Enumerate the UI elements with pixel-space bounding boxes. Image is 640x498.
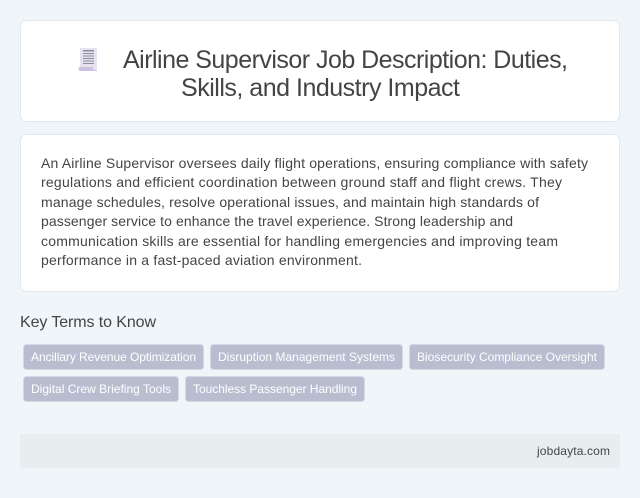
tag: Touchless Passenger Handling: Touchless Passenger Handling [193, 382, 357, 396]
text block: description: passenger service to enhance the travel experience. Strong leadership and [41, 213, 513, 229]
text block: description: An Airline Supervisor oversees daily flight operations, ensuring compliance with safety [41, 155, 588, 171]
text block: description [41, 155, 588, 268]
tag: Disruption Management Systems [210, 344, 402, 370]
text block: description: regulations and efficient coordination between ground staff and flight crews. They [41, 174, 562, 190]
tag: Digital Crew Briefing Tools: Digital Crew Briefing Tools [31, 382, 171, 396]
tag: Ancillary Revenue Optimization [24, 344, 204, 370]
tag: Digital Crew Briefing Tools [24, 376, 178, 402]
tag: Ancillary Revenue Optimization: Ancillary Revenue Optimization [31, 350, 196, 364]
text block: description: manage schedules, resolve operational issues, and maintain high standards of [41, 194, 539, 210]
footer [20, 434, 620, 468]
tag: Biosecurity Compliance Oversight [410, 344, 604, 370]
footer: jobdayta.com [536, 444, 610, 458]
tag: Biosecurity Compliance Oversight: Biosecurity Compliance Oversight [417, 350, 598, 364]
title: Airline Supervisor Job Description: Duties, [123, 46, 568, 74]
text block: description: communication skills are essential for handling emergencies and improving team [41, 233, 558, 249]
text block: description: performance in a fast-paced aviation environment. [41, 252, 362, 268]
icon: document scroll [79, 48, 97, 71]
panel: header [20, 20, 620, 122]
title [123, 46, 568, 102]
tag: Disruption Management Systems: Disruption Management Systems [218, 350, 395, 364]
title: Skills, and Industry Impact [181, 74, 460, 102]
heading: key terms: Key Terms to Know [20, 314, 156, 331]
tag: Touchless Passenger Handling [186, 376, 364, 402]
panel: description [20, 134, 620, 292]
